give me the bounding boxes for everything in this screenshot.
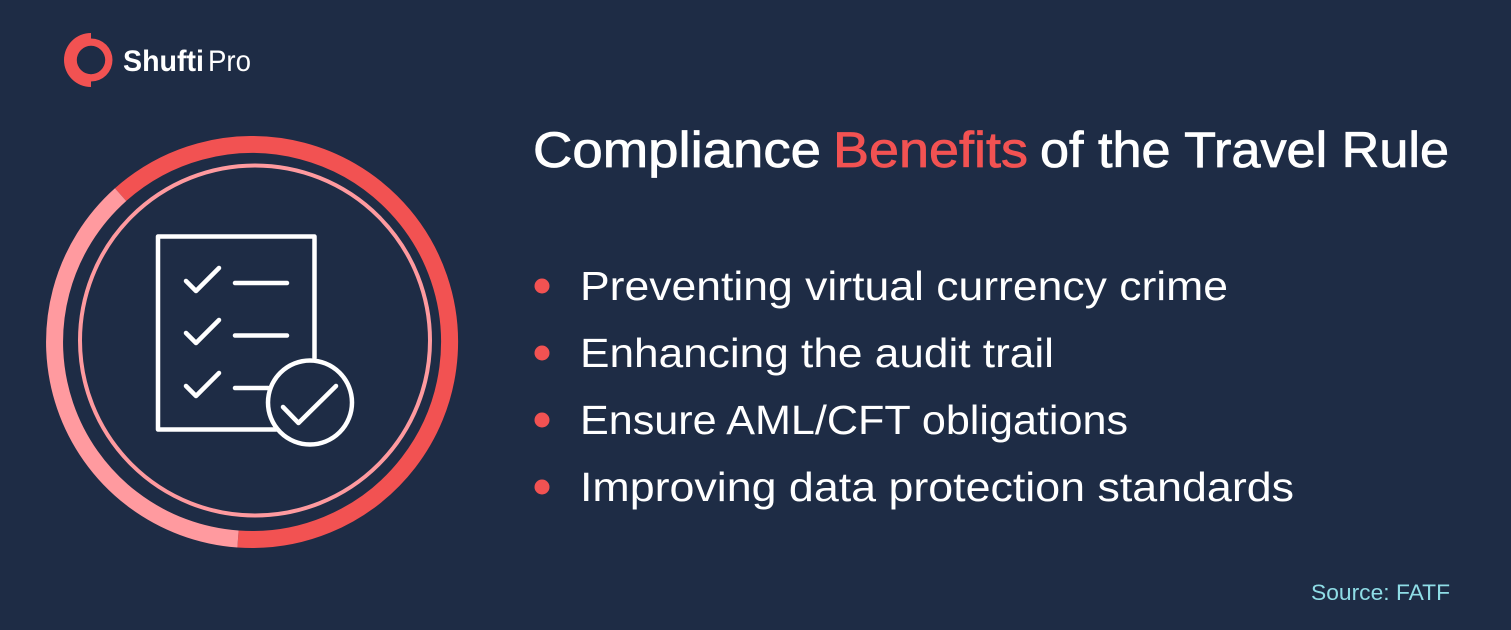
title words: of the Travel Rule: of the Travel Rule	[1040, 122, 1449, 178]
check item 1	[186, 268, 287, 291]
document outline	[158, 236, 314, 430]
logo mark	[64, 33, 112, 87]
title	[533, 122, 1449, 178]
source note: Source: FATF	[1311, 580, 1450, 605]
ring graphic	[55, 145, 450, 540]
title word: Benefits: Benefits	[833, 122, 1028, 178]
bullet item 1: Preventing virtual currency crime	[580, 263, 1228, 309]
bullet item 4: Improving data protection standards	[580, 464, 1294, 510]
logo wordmark: Pro: Pro	[208, 45, 251, 78]
logo wordmark: Shufti: Shufti	[123, 45, 204, 78]
badge circle	[268, 360, 352, 444]
inner ring	[80, 166, 430, 516]
outer ring: light pink arc	[55, 195, 238, 539]
bullet list	[534, 263, 1294, 510]
check item 2	[186, 320, 287, 343]
logo: Shufti Pro	[64, 33, 251, 87]
bullet item 3: Ensure AML/CFT obligations	[580, 397, 1128, 443]
badge check	[283, 386, 336, 423]
outer ring: dark coral arc	[121, 145, 450, 540]
icon: checklist document with check badge	[158, 236, 352, 444]
check item 3	[186, 373, 268, 396]
title word: Compliance: Compliance	[533, 122, 821, 178]
bullet item 2: Enhancing the audit trail	[580, 330, 1054, 376]
